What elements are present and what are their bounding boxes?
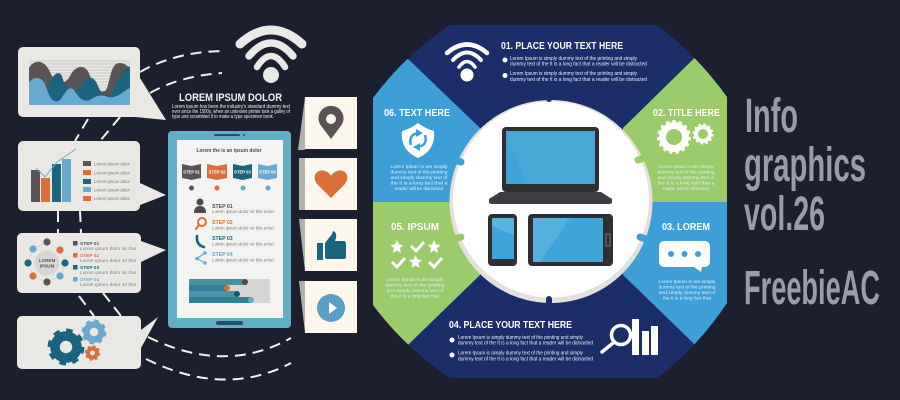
step 04 row: Lorem ipsum dolor sit this amet. [212,258,275,262]
icon: large wifi [240,30,302,83]
heading 01: 01. PLACE YOUR TEXT HERE [501,40,623,52]
hub steps list: STEP 02 [80,253,99,259]
body text 06: dummy text of the printing [390,170,448,176]
dashed connector lines [58,51,291,380]
panel: area chart card [18,47,166,120]
heading: lorem ipsum dolor: LOREM IPSUM DOLOR [179,92,282,104]
chart legend: Lorem ipsum dolor [94,179,130,184]
panel: heart tile [299,158,357,210]
bullet texts 01 [502,56,647,83]
text block: intro: Lorem Ipsum has been the industry's standard dummy text [172,104,291,110]
body text 02: dummy text of the printing [658,170,715,176]
hub diagram: LOREM [39,258,55,263]
step 03 row: STEP 03 [212,236,233,242]
bullet texts 01: Lorem Ipsum is simply dummy text of the printing and simply [510,71,637,77]
hub steps list: Lorem ipsum dolor sit this [80,246,137,251]
bullet texts 01: Lorem Ipsum is simply dummy text of the printing and simply [510,56,637,62]
icon: laptop [489,127,612,204]
panel: pin tile [298,97,357,150]
title: info graphics vol.26 [744,90,866,241]
chart legend: Lorem ipsum dolor [94,188,130,192]
body text 02 [658,164,715,192]
heading 05: 05. IPSUM [391,221,439,233]
panel: play tile [299,281,357,333]
body text 03: and simply dummy text of [658,290,716,296]
icon: heart [315,170,347,198]
heading 02: 02. TITLE HERE [653,107,720,119]
body text 03: dummy text of the printing [658,284,716,290]
panel: gears card [17,316,158,369]
bullet texts 01: dummy text of the It is a long fact that a reader will be distracted [510,62,647,68]
body text 02: and simply dummy text of [658,175,715,181]
text block: intro: ever since the 1500s, when an unknown printer took a galley of [172,109,291,115]
body text 06: reader will be distracted [394,186,444,192]
icon: location pin [318,106,344,139]
step 03 row [197,236,275,247]
hub steps list: STEP 01 [80,241,99,247]
icon: thumbs up [317,231,346,260]
icon: magnifier and bars [602,319,658,355]
heading 04: 04. PLACE YOUR TEXT HERE [449,319,572,331]
bullet texts 04 [450,335,593,362]
segment 02: title here [653,107,720,192]
center circle [450,94,652,305]
hub steps list: Lorem ipsum dolor sit this [80,270,137,275]
step 02 row: Lorem ipsum dolor sit this amet. [212,226,275,230]
body text 06: and simply dummy text of [390,175,448,181]
icon: tablet device [528,214,613,266]
segment 04: place your text here [449,319,658,362]
bullet texts 04: dummy text of the It is a long fact that a reader will be distracted [458,356,593,362]
title: info graphics vol.26: Info [745,90,798,143]
panel: hub diagram card [17,233,166,293]
icon: stars and checks [390,240,442,268]
icon: wifi [447,44,487,82]
title: info graphics vol.26: vol.26 [744,188,825,241]
hub steps list: STEP 04 [80,277,99,283]
body text 05: and simply dummy text of [386,288,444,294]
hub steps list: STEP 03 [80,265,99,271]
step ribbons [182,164,277,190]
body text 05: dummy text of the printing [386,282,445,288]
bullet texts 04: Lorem Ipsum is simply dummy text of the printing and simply [458,350,583,356]
chart legend: Lorem ipsum dolor [94,162,130,166]
step 02 row: STEP 02 [212,220,233,226]
body text 05 [386,277,445,300]
step 03 row: Lorem ipsum dolor sit this amet. [212,242,275,246]
hub diagram [24,238,69,286]
chart legend [83,161,130,201]
hub diagram: IPSUM [40,264,54,268]
body text 06: Lorem Ipsum is are simply [390,164,448,170]
bullet texts 04: dummy text of the It is a long fact that a reader will be distracted [458,340,593,346]
step 01 row [194,198,275,214]
bullet texts 04: Lorem Ipsum is simply dummy text of the printing and simply [458,335,583,341]
chart legend: Lorem ipsum dolor [94,170,130,176]
step ribbons: STEP 03 [234,170,252,174]
body text 02: reader will be distracted [663,186,709,192]
step 04 row: STEP 04 [212,252,233,258]
body text 05: Lorem Ipsum is are simply [386,277,444,283]
area chart [29,61,130,105]
step ribbons: STEP 02 [209,170,226,174]
panel: tablet [168,131,291,328]
step ribbons: STEP 04 [259,170,277,174]
segment 05: ipsum [386,221,445,300]
tablet heading: Lorem the is an ipsum dolor [196,148,262,154]
icon: gears [50,321,105,364]
segment 03: lorem [658,221,716,302]
panel: bar chart card [18,141,166,211]
body text 06 [390,164,448,192]
step ribbons: STEP 01 [183,170,201,174]
icon: chat bubble [659,241,710,272]
progress bars [189,279,270,303]
bar chart [31,149,76,202]
hub steps list [73,241,137,287]
chart legend: Lorem ipsum dolor [94,196,130,201]
segment 01: place your text here [447,40,647,83]
icon: phone [488,214,517,266]
bullet texts 01: dummy text of the It is a long fact that a reader will be distracted [510,77,647,83]
step 04 row [195,251,275,265]
body text 02: Lorem Ipsum is are simply [658,164,714,170]
step 01 row: STEP 01 [212,204,233,210]
icon: white gears [658,122,712,152]
icon: shield with sync arrows [402,123,434,158]
panel: thumbs up tile [299,219,357,271]
panel: octagon background [360,20,740,385]
hub steps list: Lorem ipsum dolor sit this [80,258,137,263]
body text 03: the It is a long fact that [663,296,712,302]
body text 05: the It is a long fact that [391,294,440,300]
body text 03 [658,279,716,302]
heading 06: 06. TEXT HERE [384,107,450,119]
hub steps list: Lorem ipsum dolor sit this [80,282,137,287]
text block: intro: type and scrambled it to make a type specimen book. [172,114,274,120]
segment 06: text here [384,107,450,192]
body text 02: the It is a long fact that a [658,180,715,186]
body text 06: the It is a long fact that a [390,180,448,186]
heading 03: 03. LOREM [662,221,710,233]
text block: intro [172,104,291,120]
step 02 row [196,218,275,230]
icon: play button [317,294,345,322]
step 01 row: Lorem ipsum dolor sit this amet. [212,209,275,214]
body text 03: Lorem Ipsum is are simply [658,279,716,285]
